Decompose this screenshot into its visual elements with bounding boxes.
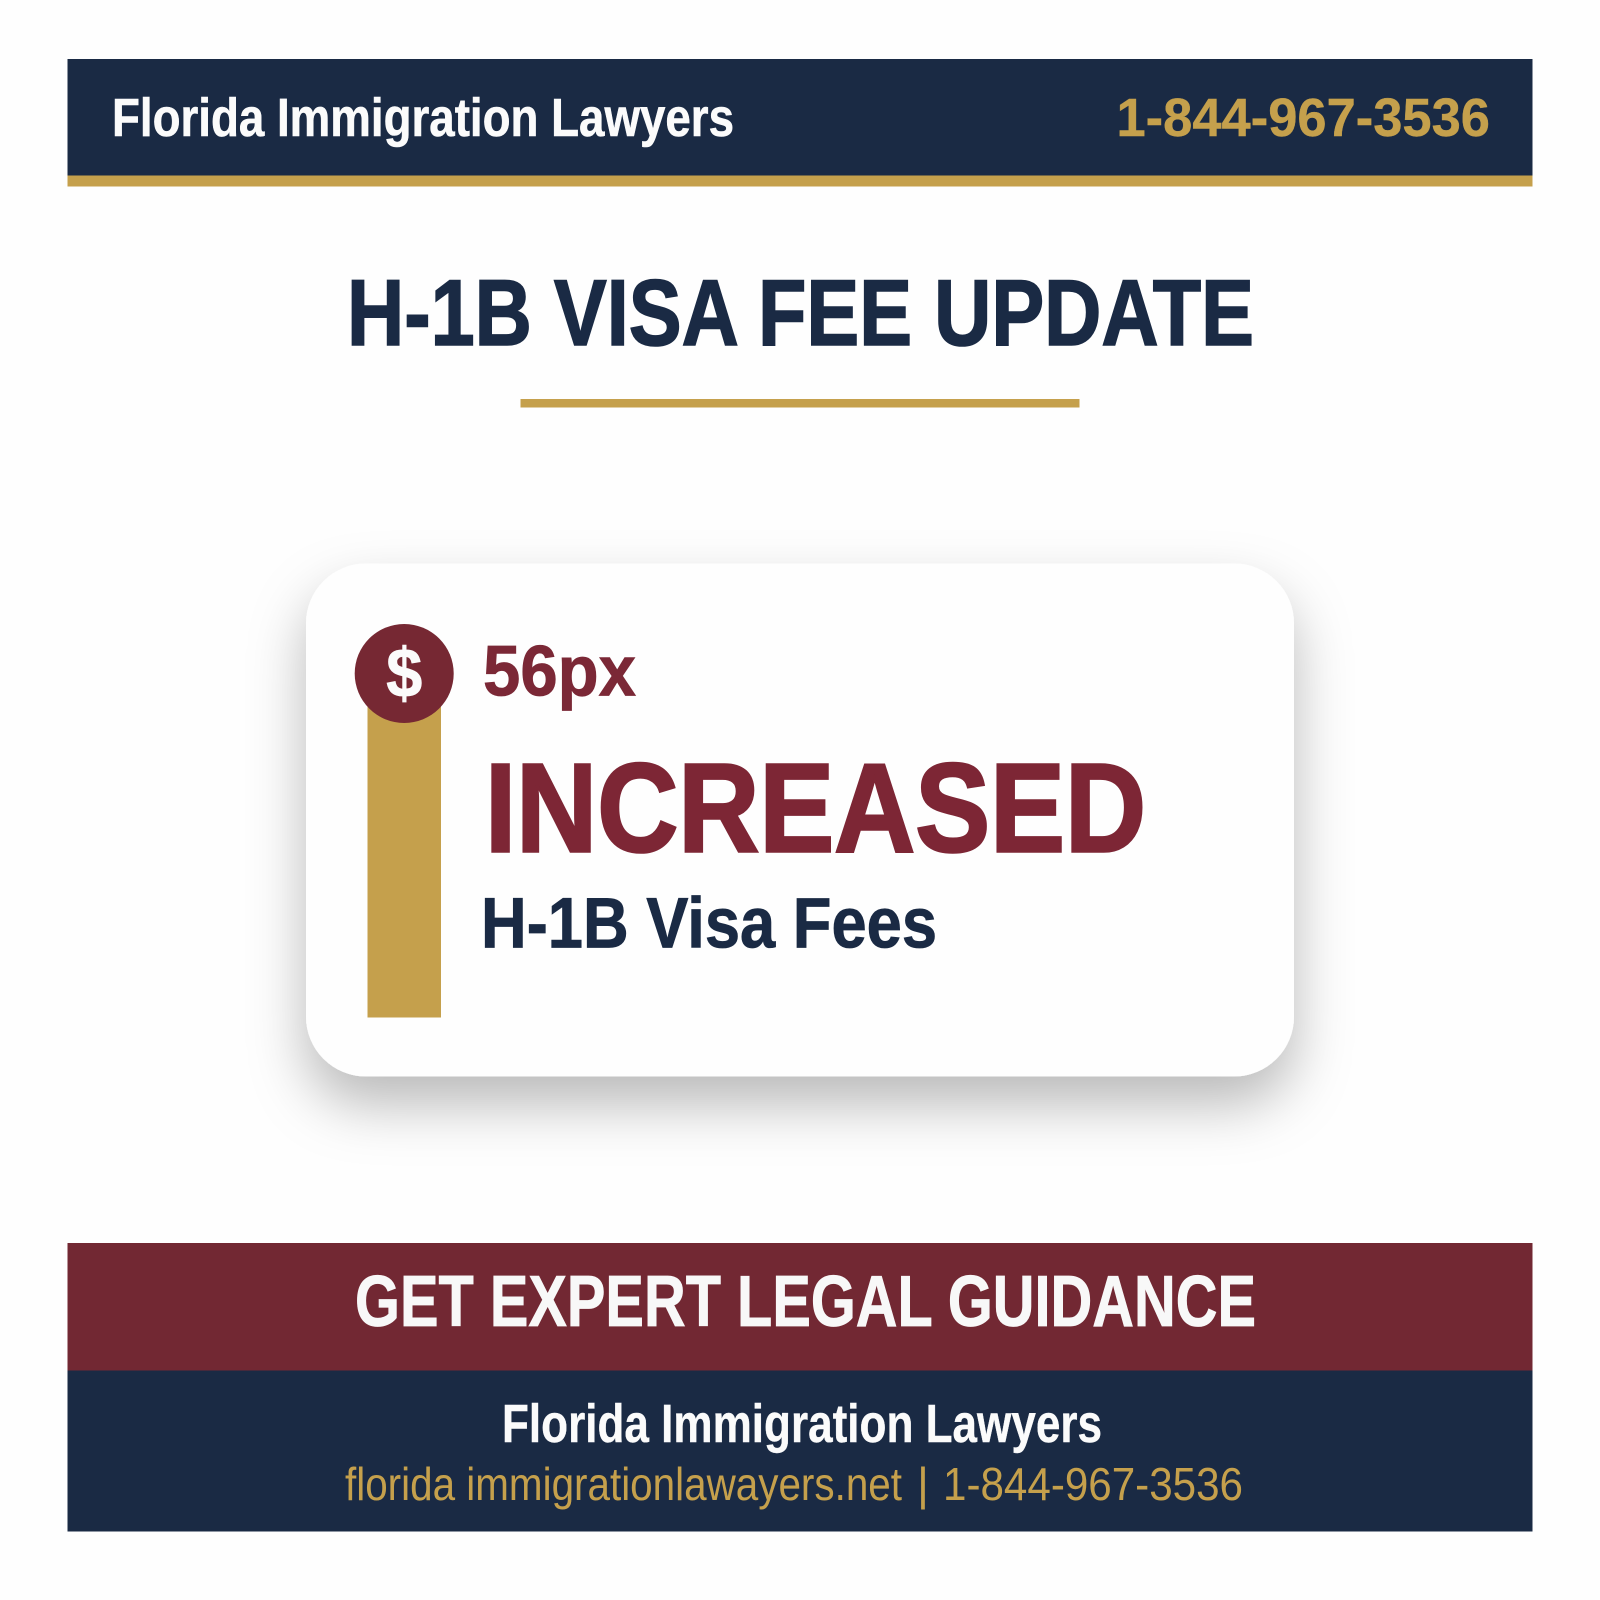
header firm name: Florida Immigration Lawyers [112,88,734,148]
icon: dollar circle: $ [386,634,422,712]
card subhead: H-1B visa fees: H-1B Visa Fees [481,884,937,964]
title: H-1B VISA FEE UPDATE [347,260,1254,365]
footer firm name: Florida Immigration Lawyers [502,1394,1102,1454]
footer website and phone: florida immigrationlawayers.net [345,1458,902,1510]
call-to-action band [68,1243,1532,1371]
card headline: increased: INCREASED [485,738,1146,878]
footer website and phone: | [917,1458,929,1510]
footer contact band [68,1370,1532,1532]
call-to-action text: GET EXPERT LEGAL GUIDANCE [355,1262,1256,1342]
panel: fee card [306,564,1294,1076]
icon: dollar circle [355,624,454,723]
title underline [520,399,1080,408]
header phone number: 1-844-967-3536 [1116,88,1490,148]
card label: 56px: 56px [483,632,636,712]
footer website and phone: 1-844-967-3536 [943,1458,1243,1510]
header bar [68,59,1532,186]
gold vertical bar [368,700,441,1018]
